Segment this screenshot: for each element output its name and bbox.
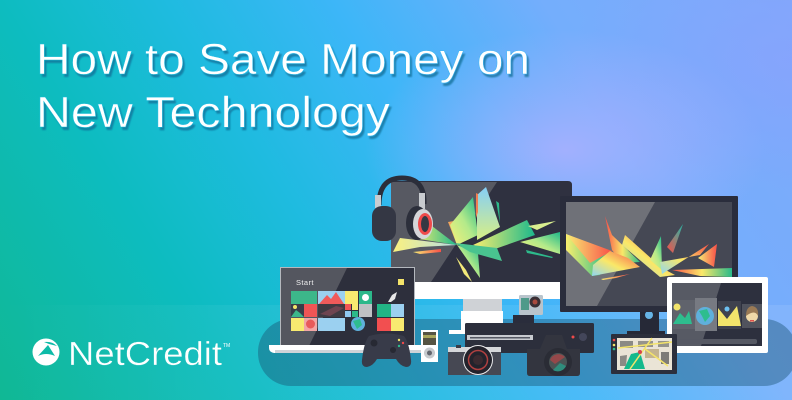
tablet card: yellow mountain — [718, 301, 741, 329]
abstract artwork left — [393, 187, 560, 282]
title: How to Save Money on — [38, 38, 532, 87]
title — [36, 35, 532, 140]
monitor right stand — [627, 311, 665, 335]
logo wordmark: NetCredit — [68, 335, 222, 372]
title: New Technology — [38, 91, 392, 140]
GPS map — [617, 338, 672, 370]
NetCredit logo — [32, 335, 230, 372]
floor band — [0, 305, 792, 400]
tablet dock — [677, 339, 757, 344]
monitor chin — [391, 282, 572, 299]
title: How to Save Money on — [36, 35, 530, 84]
monitor right frame — [560, 196, 738, 312]
device platform pill — [258, 319, 792, 386]
monitor right screen — [566, 202, 732, 306]
laptop screen — [280, 267, 415, 346]
headband — [379, 178, 424, 205]
laptop tiles — [291, 279, 404, 331]
DSLR camera — [527, 335, 580, 376]
right ear cup — [406, 206, 433, 240]
game controller — [362, 334, 411, 367]
retro camera — [448, 345, 501, 375]
tablet screen — [672, 283, 762, 346]
action camera — [513, 295, 543, 323]
laptop — [269, 267, 423, 353]
abstract artwork right — [566, 216, 732, 280]
media player — [421, 330, 438, 362]
headphones — [372, 178, 433, 241]
monitor left — [391, 181, 572, 334]
trademark: TM — [223, 343, 230, 349]
tablet card: portrait — [742, 304, 762, 328]
title: New Technology — [36, 88, 390, 137]
start label: Start — [296, 278, 314, 287]
monitor stand — [449, 299, 503, 334]
set-top box — [465, 323, 594, 353]
laptop base — [269, 345, 423, 353]
left ear cup — [372, 206, 396, 241]
GPS navigator — [611, 334, 677, 374]
tablet card: landscape — [673, 300, 695, 329]
monitor screen — [391, 181, 572, 282]
tablet card: globe — [695, 298, 717, 331]
monitor right — [560, 196, 738, 335]
icon: logo globe — [32, 338, 60, 366]
tablet — [667, 277, 768, 353]
